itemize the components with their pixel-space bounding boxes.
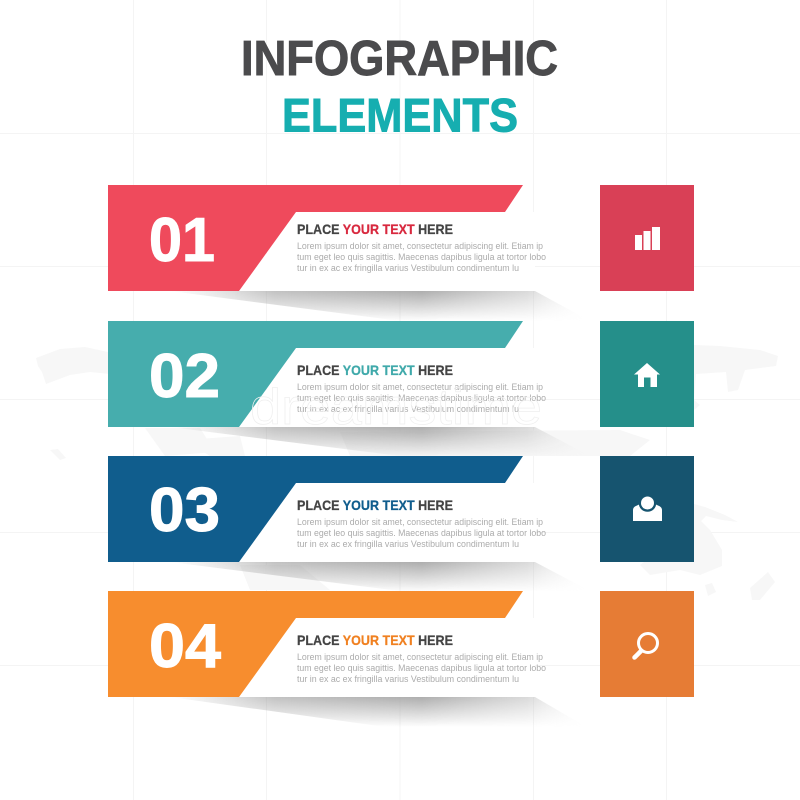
white text card 04 xyxy=(239,618,535,697)
body text 03: tum eget leo quis sagittis. Maecenas dapibus ligula at tortor lobo xyxy=(297,528,546,539)
number 04: 04 xyxy=(149,612,222,681)
icon tile: home xyxy=(600,321,694,427)
number 02: 02 xyxy=(149,342,220,411)
body text 02: Lorem ipsum dolor sit amet, consectetur adipiscing elit. Etiam ip xyxy=(297,382,543,393)
body text 01: Lorem ipsum dolor sit amet, consectetur adipiscing elit. Etiam ip xyxy=(297,241,543,252)
panel: item 04 xyxy=(108,591,558,724)
ribbon 03 xyxy=(108,456,523,562)
heading 01: PLACE YOUR TEXT HERE xyxy=(297,221,453,237)
banner shadow 02 xyxy=(186,427,556,454)
body text 04: Lorem ipsum dolor sit amet, consectetur adipiscing elit. Etiam ip xyxy=(297,652,543,663)
heading 03: PLACE YOUR TEXT HERE xyxy=(297,497,453,513)
body text 02 xyxy=(297,382,546,415)
title: INFOGRAPHIC xyxy=(241,32,558,86)
ribbon 01 xyxy=(108,185,523,291)
body text 04 xyxy=(297,652,546,685)
panel: item 02 xyxy=(108,321,590,456)
white text card 03 xyxy=(239,483,535,562)
body text 02: tum eget leo quis sagittis. Maecenas dapibus ligula at tortor lobo xyxy=(297,393,546,404)
body text 03 xyxy=(297,517,546,550)
ribbon 04 xyxy=(108,591,523,697)
body text 01: tur in ex ac ex fringilla varius Vestibulum condimentum lu xyxy=(297,263,519,274)
body text 01: tum eget leo quis sagittis. Maecenas dapibus ligula at tortor lobo xyxy=(297,252,546,263)
body text 03: Lorem ipsum dolor sit amet, consectetur adipiscing elit. Etiam ip xyxy=(297,517,543,528)
heading 02: PLACE YOUR TEXT HERE xyxy=(297,362,453,378)
number 01: 01 xyxy=(149,206,215,275)
banner shadow 01 xyxy=(186,291,558,318)
world map silhouette xyxy=(36,345,778,600)
title xyxy=(241,32,558,142)
banner shadow 03 xyxy=(186,562,558,589)
panel: item 01 xyxy=(108,185,590,321)
banner shadow 04 xyxy=(186,697,558,724)
heading 04: PLACE YOUR TEXT HERE xyxy=(297,632,453,648)
body text 03: tur in ex ac ex fringilla varius Vestibulum condimentum lu xyxy=(297,539,519,550)
white text card 01 xyxy=(239,212,535,291)
body text 01 xyxy=(297,241,546,274)
icon tile: magnifier xyxy=(600,591,694,697)
icon tile: person xyxy=(600,456,694,562)
white text card 02 xyxy=(239,348,535,427)
ribbon 02 xyxy=(108,321,523,427)
panel: item 03 xyxy=(108,456,590,591)
icon tile: bar chart xyxy=(600,185,694,291)
title: ELEMENTS xyxy=(282,88,518,142)
body text 02: tur in ex ac ex fringilla varius Vestibulum condimentum lu xyxy=(297,404,519,415)
number 03: 03 xyxy=(149,476,220,545)
body text 04: tur in ex ac ex fringilla varius Vestibulum condimentum lu xyxy=(297,674,519,685)
watermark: dreamstime xyxy=(250,379,542,435)
body text 04: tum eget leo quis sagittis. Maecenas dapibus ligula at tortor lobo xyxy=(297,663,546,674)
